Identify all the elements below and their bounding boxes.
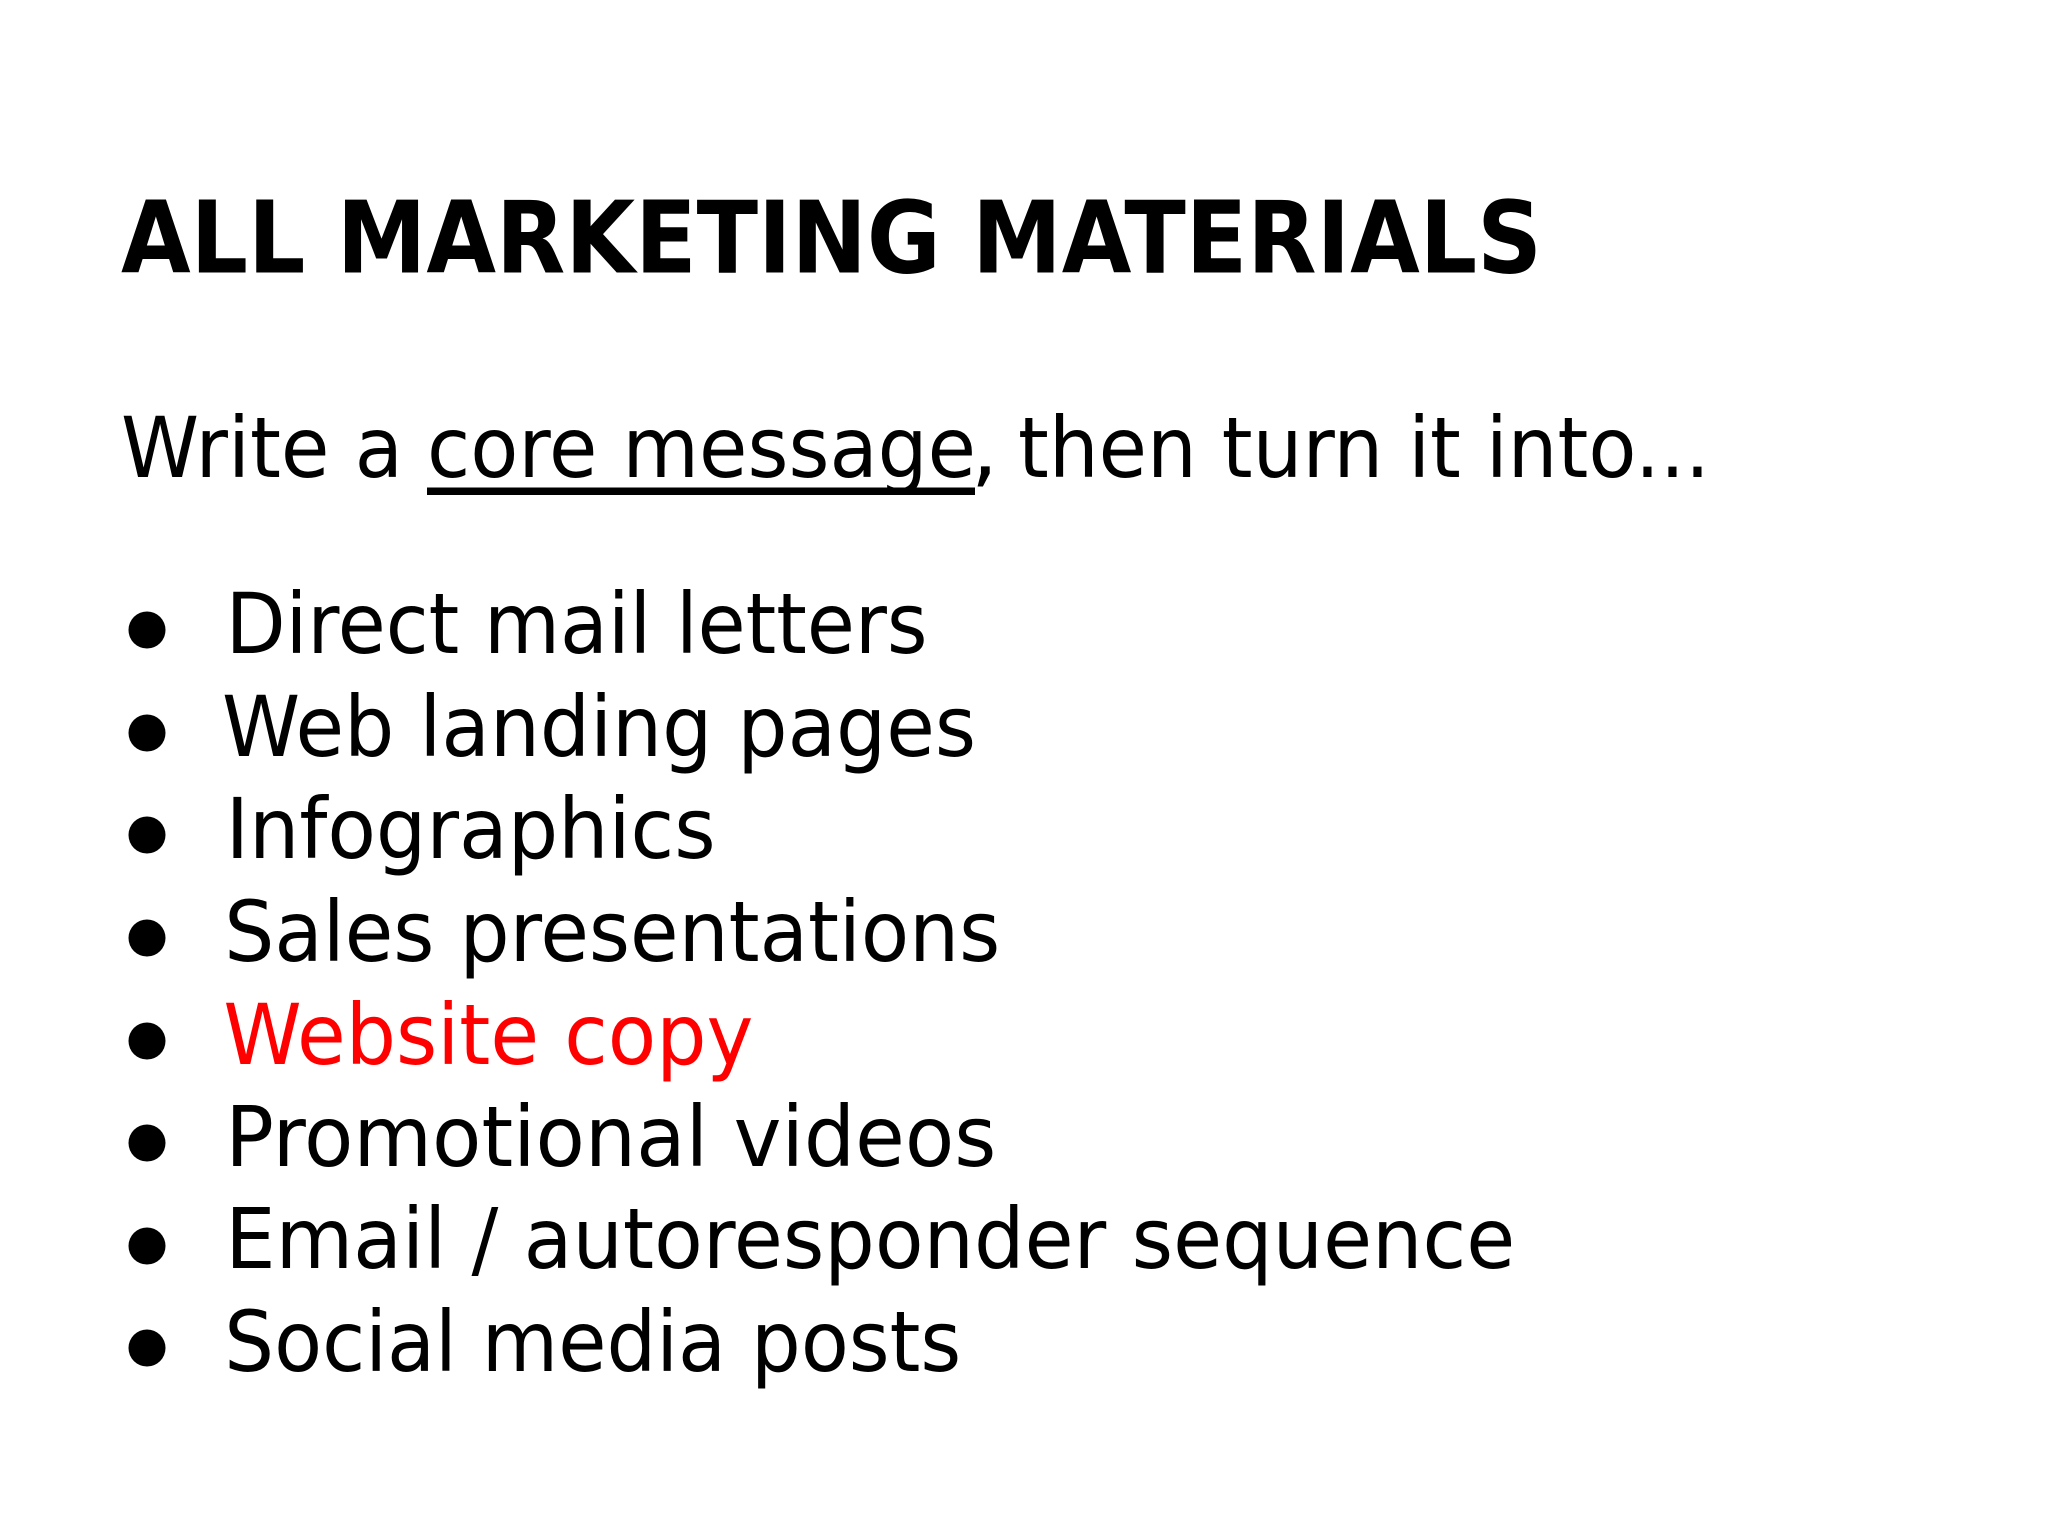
list item: direct mail letters: Direct mail letters <box>226 575 928 673</box>
intro line: Write a <box>121 399 403 497</box>
title: ALL MARKETING MATERIALS <box>121 180 1542 296</box>
intro line: then turn it into... <box>1018 399 1710 497</box>
intro line: , <box>971 399 998 497</box>
intro line <box>121 399 1710 497</box>
bullet list <box>128 575 1515 1391</box>
underlined phrase: core message: core message <box>427 399 976 497</box>
list item: email / autoresponder sequence: Email / autoresponder sequence <box>225 1190 1515 1288</box>
list item: social media posts: Social media posts <box>224 1293 961 1391</box>
list item: web landing pages: Web landing pages <box>222 678 976 776</box>
list item: sales presentations: Sales presentations <box>224 883 1000 981</box>
list item: promotional videos: Promotional videos <box>225 1088 996 1186</box>
list item: website copy (highlighted red): Website copy <box>223 986 753 1084</box>
list item: infographics: Infographics <box>226 780 716 878</box>
